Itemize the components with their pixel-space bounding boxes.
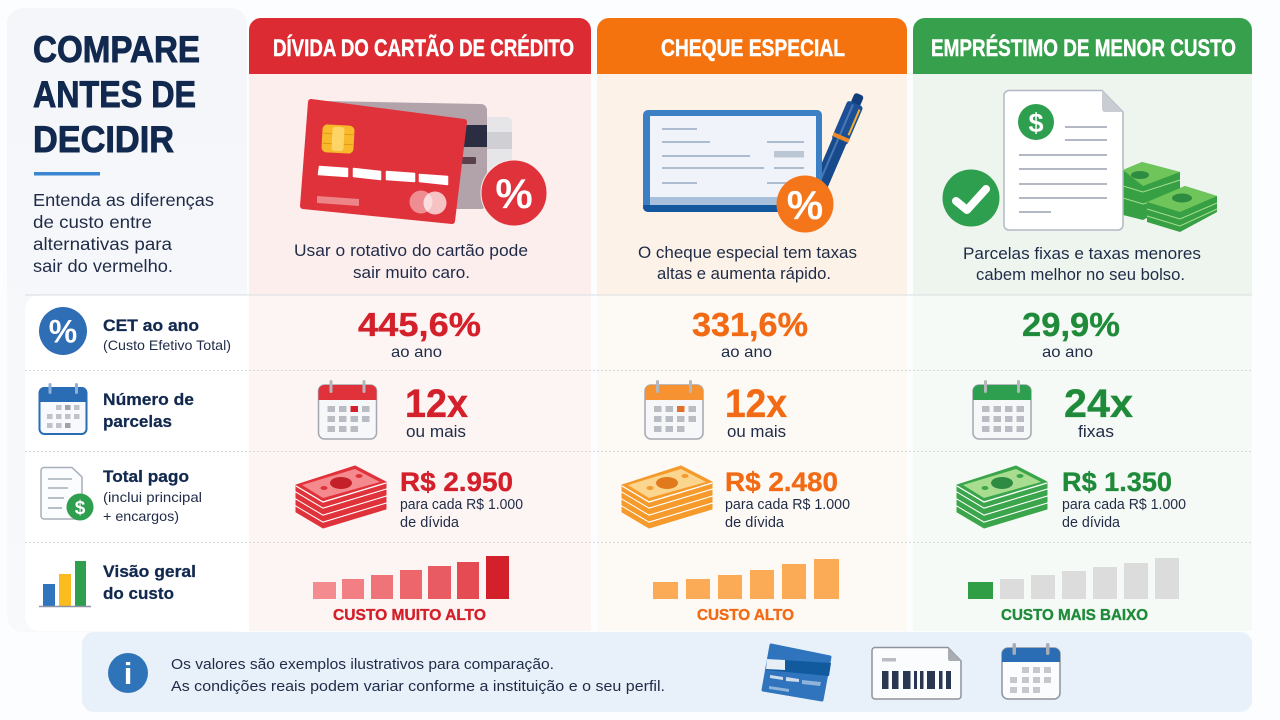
label: Número de parcelas: parcelas <box>103 412 172 431</box>
value: total pago: de dívida <box>1062 515 1121 531</box>
icon: percent <box>39 307 87 355</box>
value: total pago <box>1062 467 1186 531</box>
icon: calendar <box>318 380 376 439</box>
icon: invoice with dollar: $ <box>75 498 86 519</box>
icon: contract, money and check <box>942 90 1217 232</box>
value: parcelas: 24x <box>1064 382 1133 426</box>
panel: footer note <box>82 632 1252 712</box>
footer text: As condições reais podem variar conforme a instituição e o seu perfil. <box>171 679 665 695</box>
header: dívida do cartão: DÍVIDA DO CARTÃO DE CRÉDITO <box>273 34 574 62</box>
intro text: de custo entre <box>33 212 152 232</box>
caption: O cheque especial tem taxas <box>638 243 857 262</box>
intro text: sair do vermelho. <box>33 256 173 276</box>
caption: Parcelas fixas e taxas menores <box>963 244 1201 263</box>
header: cheque especial: CHEQUE ESPECIAL <box>661 35 845 62</box>
value: CET: 29,9% <box>1022 306 1120 343</box>
label: Visão geral do custo: Visão geral <box>103 562 196 581</box>
icon: money stack <box>957 466 1047 528</box>
title: COMPARE <box>33 29 200 70</box>
label: Número de parcelas: Número de <box>103 390 194 409</box>
label: CET ao ano <box>103 316 231 353</box>
label: Número de parcelas <box>103 390 194 431</box>
caption: cabem melhor no seu bolso. <box>976 265 1185 284</box>
icon: contract, money and check: $ <box>1028 108 1044 138</box>
icon: info: i <box>124 656 132 691</box>
value: parcelas: 12x <box>405 382 468 426</box>
icon: bar chart <box>39 561 91 606</box>
icon: blue calendar <box>1002 643 1060 699</box>
value: CET: ao ano <box>1042 344 1093 361</box>
header: empréstimo de menor custo <box>913 18 1252 74</box>
icon: calendar <box>39 383 87 434</box>
caption <box>638 243 857 283</box>
value: total pago: de dívida <box>400 515 460 531</box>
header: cheque especial <box>597 18 907 74</box>
value: total pago: para cada R$ 1.000 <box>725 497 850 513</box>
icon: check with pen and percent <box>643 91 867 232</box>
label: custo muito alto: CUSTO MUITO ALTO <box>333 607 486 624</box>
value: total pago: R$ 2.480 <box>725 467 838 497</box>
value: CET: 331,6% <box>692 306 808 343</box>
icon: money stack <box>296 466 386 528</box>
value: parcelas: ou mais <box>727 423 786 441</box>
icon: credit cards with percent <box>303 101 547 226</box>
bar chart: custo muito alto <box>313 556 509 599</box>
title <box>33 29 200 160</box>
icon: calendar <box>973 380 1031 439</box>
value: CET: ao ano <box>721 344 772 361</box>
caption: Usar o rotativo do cartão pode <box>294 241 528 260</box>
panel: left intro <box>7 8 247 632</box>
value: total pago: para cada R$ 1.000 <box>400 497 523 513</box>
value: total pago: R$ 2.950 <box>400 467 513 497</box>
bar chart: custo alto <box>653 559 839 599</box>
value: CET: 445,6% <box>358 306 481 343</box>
icon: barcode bill <box>872 648 961 699</box>
label: Visão geral do custo: do custo <box>103 584 174 603</box>
header: dívida do cartão <box>249 18 591 74</box>
icon: check with pen and percent: % <box>787 182 823 228</box>
value: CET <box>1022 306 1120 361</box>
panel: cartão de crédito column <box>249 18 591 631</box>
caption: altas e aumenta rápido. <box>657 264 831 283</box>
label: CET ao ano: (Custo Efetivo Total) <box>103 337 231 353</box>
intro text <box>33 190 214 276</box>
value: total pago: R$ 1.350 <box>1062 467 1172 497</box>
label: Total pago: + encargos) <box>103 508 179 524</box>
panel: cheque especial column <box>597 18 907 631</box>
value: CET <box>358 306 481 361</box>
value: total pago <box>725 467 850 531</box>
icon: blue card <box>763 645 831 700</box>
label: CET ao ano: CET ao ano <box>103 316 199 335</box>
bar chart: custo mais baixo <box>968 558 1179 599</box>
title accent line <box>34 172 100 176</box>
value: total pago: de dívida <box>725 515 785 531</box>
icon: invoice with dollar <box>41 468 94 520</box>
icon: info <box>108 653 148 693</box>
caption <box>294 241 528 282</box>
value: total pago: para cada R$ 1.000 <box>1062 497 1186 513</box>
intro text: Entenda as diferenças <box>33 190 214 210</box>
label: custo mais baixo: CUSTO MAIS BAIXO <box>1001 607 1148 624</box>
label: Total pago: (inclui principal <box>103 489 202 505</box>
caption: sair muito caro. <box>353 263 470 282</box>
icon: calendar <box>645 380 703 439</box>
intro text: alternativas para <box>33 234 172 254</box>
caption <box>963 244 1201 284</box>
value: parcelas: 12x <box>725 382 787 426</box>
value: total pago <box>400 467 523 531</box>
panel: row labels <box>25 295 252 631</box>
title: DECIDIR <box>33 119 174 160</box>
label: Total pago: Total pago <box>103 467 189 486</box>
footer text: Os valores são exemplos ilustrativos para comparação. <box>171 657 554 673</box>
label: Total pago <box>103 467 202 524</box>
footer text <box>171 657 665 695</box>
icon: credit cards with percent: % <box>495 170 533 217</box>
label: Visão geral do custo <box>103 562 196 603</box>
value: parcelas: fixas <box>1078 423 1114 441</box>
value: CET: ao ano <box>391 344 442 361</box>
title: ANTES DE <box>33 74 196 115</box>
icon: money stack <box>622 466 712 528</box>
label: custo alto: CUSTO ALTO <box>697 607 794 624</box>
value: CET <box>692 306 808 361</box>
panel: empréstimo column <box>913 18 1252 631</box>
icon: percent: % <box>49 314 77 350</box>
value: parcelas: ou mais <box>406 423 466 441</box>
